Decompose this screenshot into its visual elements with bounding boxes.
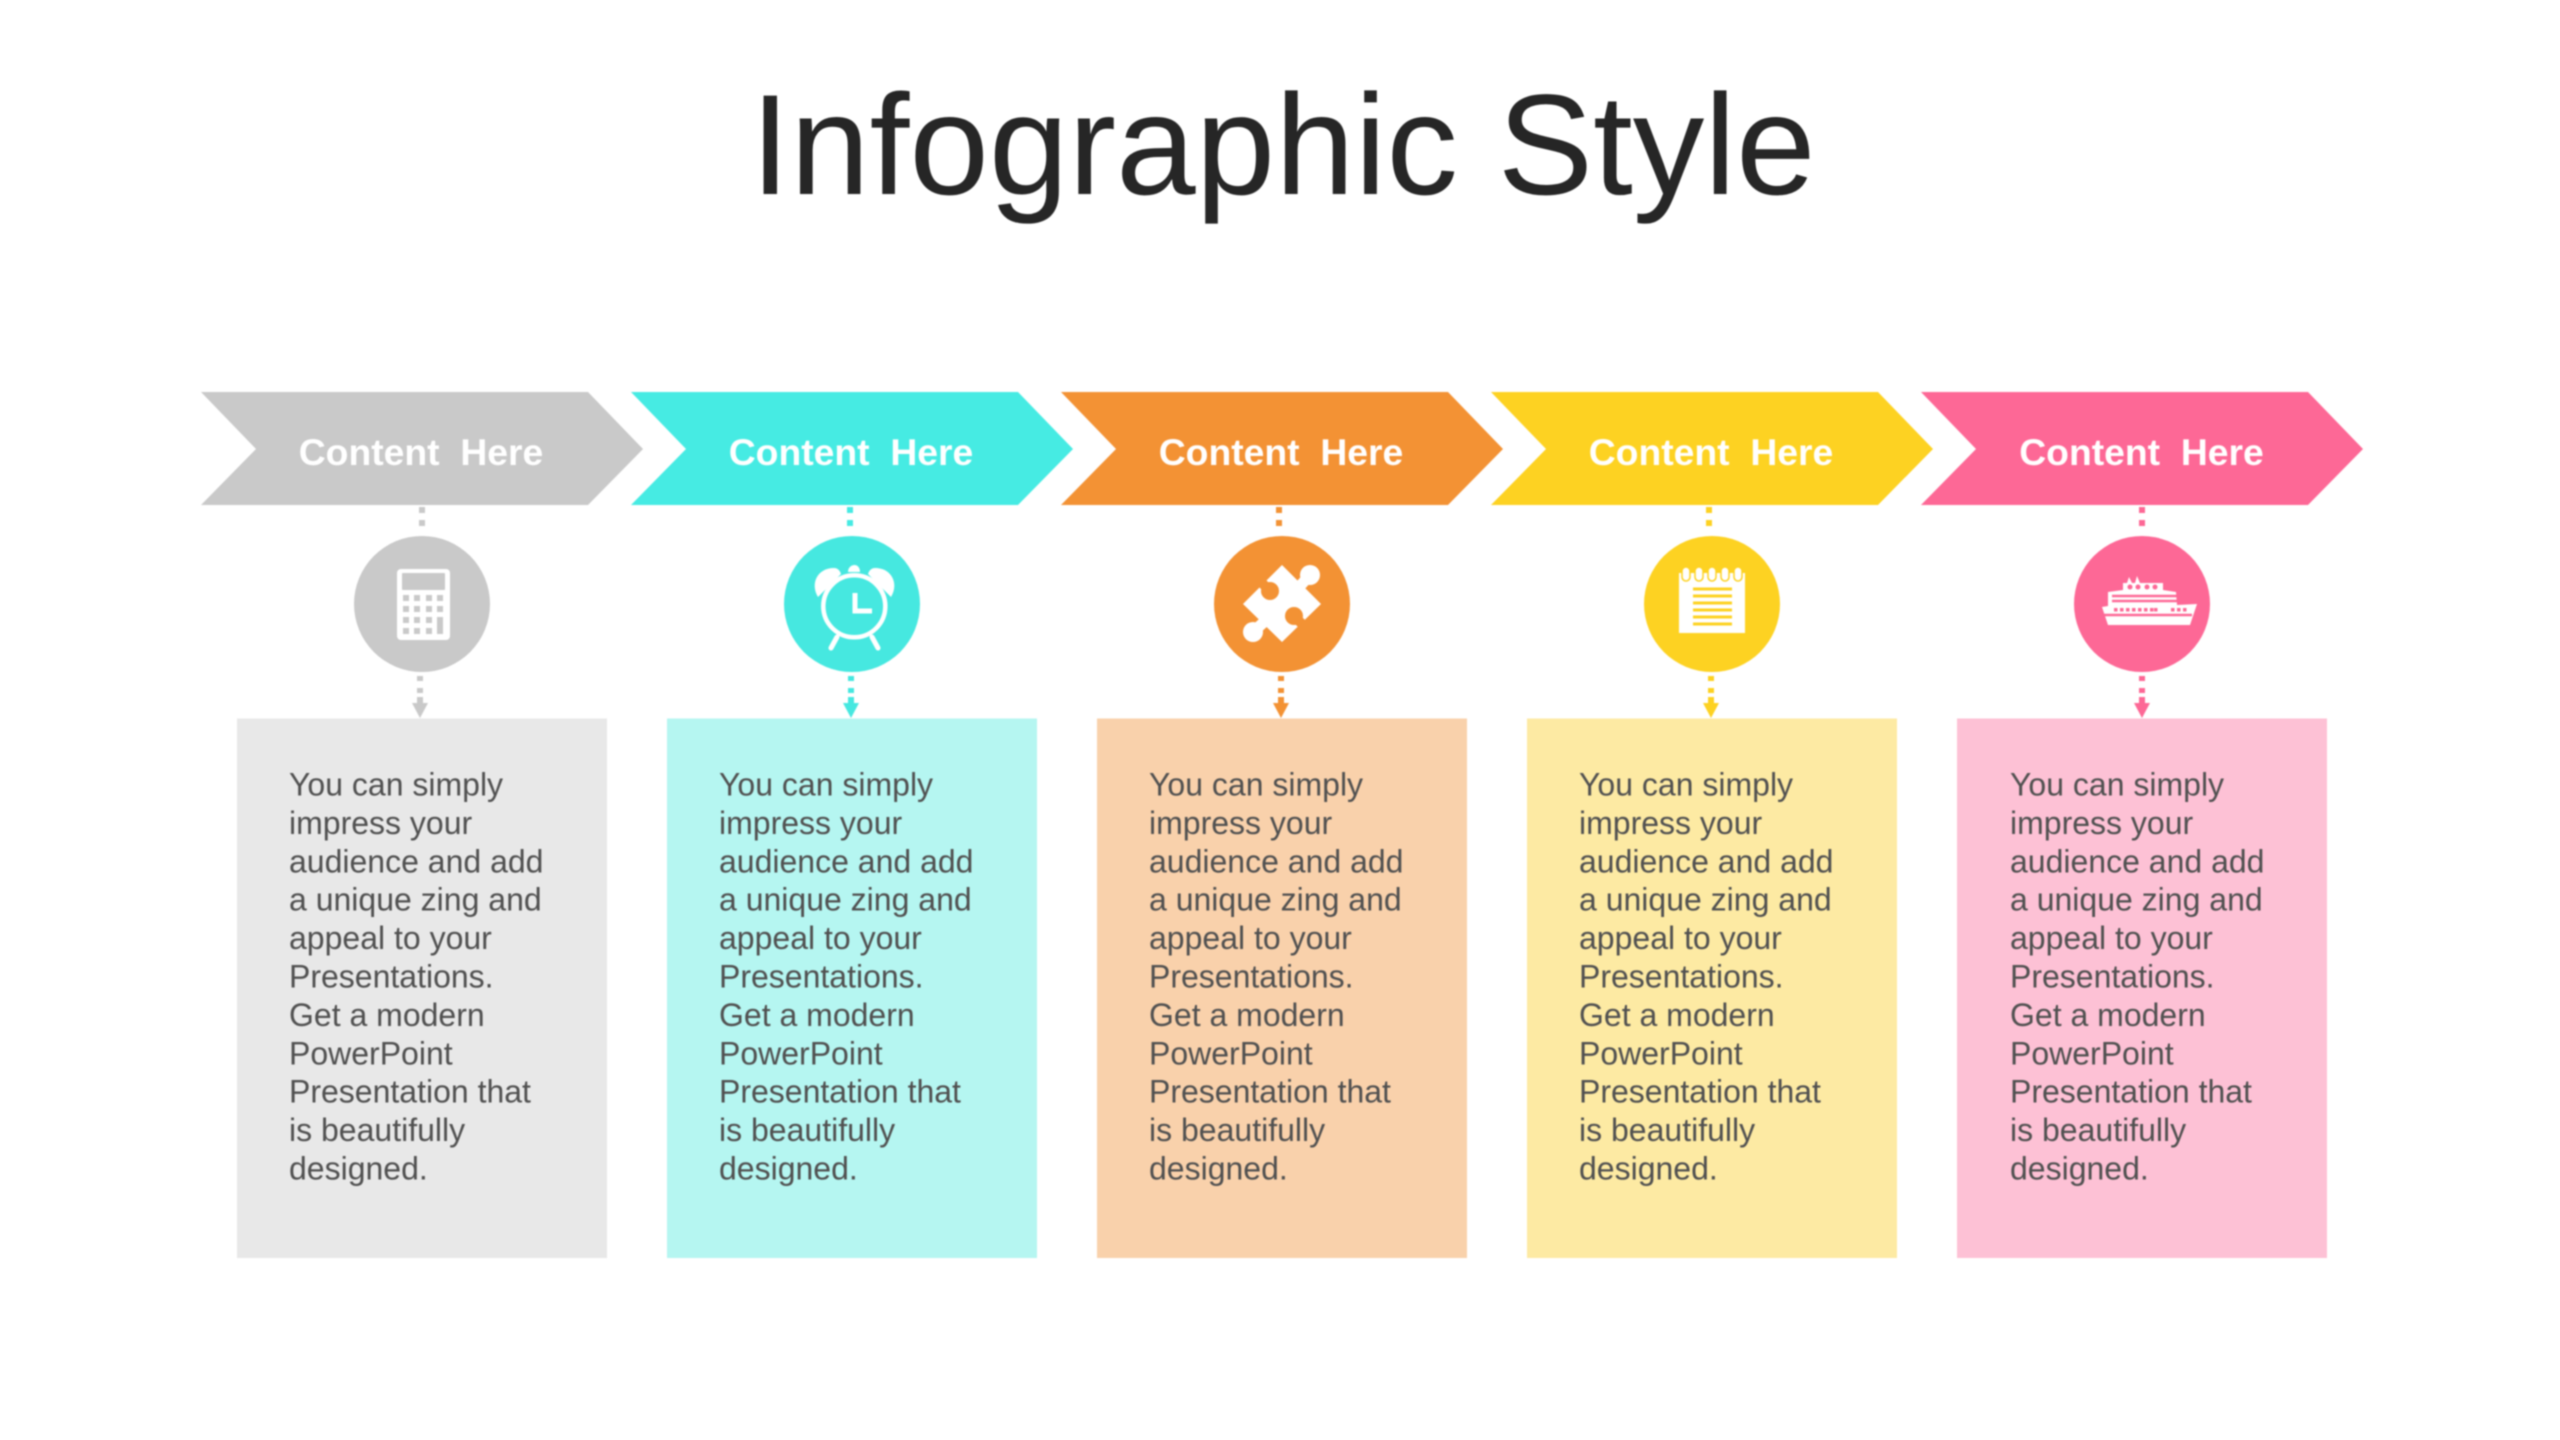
text panel 3: You can simply bbox=[1149, 766, 1363, 802]
chevron header 4: Content Here bbox=[1589, 431, 1833, 473]
text panel 5: Presentations. bbox=[2010, 958, 2215, 994]
text panel 2: audience and add bbox=[719, 843, 973, 879]
text panel 3: PowerPoint bbox=[1149, 1035, 1313, 1071]
text panel 1: Presentations. bbox=[289, 958, 494, 994]
text panel 3: audience and add bbox=[1149, 843, 1403, 879]
text panel 5 bbox=[1957, 718, 2327, 1258]
text panel 5: impress your bbox=[2010, 805, 2194, 841]
text panel 2: Presentations. bbox=[719, 958, 924, 994]
panel: column 2 turquoise bbox=[631, 392, 1073, 1258]
text panel 2: a unique zing and bbox=[719, 882, 972, 918]
text panel 4: impress your bbox=[1579, 805, 1762, 841]
text panel 2: PowerPoint bbox=[719, 1035, 883, 1071]
text panel 4 bbox=[1527, 718, 1897, 1258]
text panel 5: Get a modern bbox=[2010, 997, 2206, 1033]
text panel 5: audience and add bbox=[2010, 843, 2264, 879]
text panel 4: is beautifully bbox=[1579, 1112, 1755, 1148]
text panel 2: Get a modern bbox=[719, 997, 915, 1033]
text panel 4: audience and add bbox=[1579, 843, 1833, 879]
text panel 2: Presentation that bbox=[719, 1074, 961, 1110]
text panel 4: appeal to your bbox=[1579, 920, 1782, 956]
text panel 3: impress your bbox=[1149, 805, 1332, 841]
icon: alarm clock bbox=[784, 536, 920, 672]
text panel 3: Presentations. bbox=[1149, 958, 1354, 994]
text panel 5: designed. bbox=[2010, 1150, 2149, 1186]
title: Infographic Style bbox=[750, 66, 1816, 225]
text panel 3: is beautifully bbox=[1149, 1112, 1325, 1148]
text panel 5: You can simply bbox=[2010, 766, 2224, 802]
text panel 5: a unique zing and bbox=[2010, 882, 2263, 918]
text panel 3: Get a modern bbox=[1149, 997, 1345, 1033]
text panel 1: is beautifully bbox=[289, 1112, 465, 1148]
text panel 3: Presentation that bbox=[1149, 1074, 1391, 1110]
chevron header 4 bbox=[1491, 392, 1933, 505]
text panel 1: designed. bbox=[289, 1150, 428, 1186]
text panel 1: PowerPoint bbox=[289, 1035, 453, 1071]
text panel 4: designed. bbox=[1579, 1150, 1718, 1186]
text panel 1: audience and add bbox=[289, 843, 543, 879]
text panel 4: Presentations. bbox=[1579, 958, 1784, 994]
text panel 5: Presentation that bbox=[2010, 1074, 2252, 1110]
text panel 1: Get a modern bbox=[289, 997, 485, 1033]
connector top 4 bbox=[1706, 507, 1712, 533]
text panel 2: is beautifully bbox=[719, 1112, 895, 1148]
chevron header 5: Content Here bbox=[2019, 431, 2264, 473]
text panel 3 bbox=[1097, 718, 1467, 1258]
chevron header 1: Content Here bbox=[299, 431, 543, 473]
arrow down 1 bbox=[412, 676, 428, 718]
text panel 2: impress your bbox=[719, 805, 902, 841]
text panel 2: appeal to your bbox=[719, 920, 922, 956]
panel: column 1 grey bbox=[201, 392, 643, 1258]
icon: ship bbox=[2074, 536, 2210, 672]
icon: puzzle piece bbox=[1214, 536, 1350, 672]
connector top 5 bbox=[2139, 507, 2145, 533]
text panel 1: appeal to your bbox=[289, 920, 492, 956]
arrow down 3 bbox=[1273, 676, 1289, 718]
text panel 5: PowerPoint bbox=[2010, 1035, 2174, 1071]
chevron header 2 bbox=[631, 392, 1073, 505]
text panel 4: Get a modern bbox=[1579, 997, 1775, 1033]
icon: calculator bbox=[354, 536, 490, 672]
icon: notepad bbox=[1644, 536, 1780, 672]
chevron header 2: Content Here bbox=[729, 431, 973, 473]
panel: column 3 orange bbox=[1061, 392, 1503, 1258]
text panel 1: Presentation that bbox=[289, 1074, 531, 1110]
arrow down 2 bbox=[843, 676, 859, 718]
connector top 1 bbox=[419, 507, 425, 533]
text panel 2: designed. bbox=[719, 1150, 858, 1186]
text panel 3: appeal to your bbox=[1149, 920, 1352, 956]
chevron header 1 bbox=[201, 392, 643, 505]
text panel 4: PowerPoint bbox=[1579, 1035, 1743, 1071]
connector top 2 bbox=[847, 507, 853, 533]
text panel 5: is beautifully bbox=[2010, 1112, 2186, 1148]
text panel 1: impress your bbox=[289, 805, 472, 841]
panel: column 5 pink bbox=[1921, 392, 2363, 1258]
text panel 1 bbox=[237, 718, 607, 1258]
text panel 5: appeal to your bbox=[2010, 920, 2213, 956]
text panel 4: a unique zing and bbox=[1579, 882, 1832, 918]
text panel 4: Presentation that bbox=[1579, 1074, 1821, 1110]
chevron header 5 bbox=[1921, 392, 2363, 505]
connector top 3 bbox=[1276, 507, 1282, 533]
chevron header 3: Content Here bbox=[1159, 431, 1403, 473]
text panel 3: a unique zing and bbox=[1149, 882, 1402, 918]
text panel 2 bbox=[667, 718, 1037, 1258]
text panel 2: You can simply bbox=[719, 766, 933, 802]
text panel 1: You can simply bbox=[289, 766, 503, 802]
text panel 1: a unique zing and bbox=[289, 882, 542, 918]
text panel 4: You can simply bbox=[1579, 766, 1793, 802]
chevron header 3 bbox=[1061, 392, 1503, 505]
arrow down 5 bbox=[2134, 676, 2150, 718]
arrow down 4 bbox=[1703, 676, 1719, 718]
text panel 3: designed. bbox=[1149, 1150, 1288, 1186]
panel: column 4 yellow bbox=[1491, 392, 1933, 1258]
